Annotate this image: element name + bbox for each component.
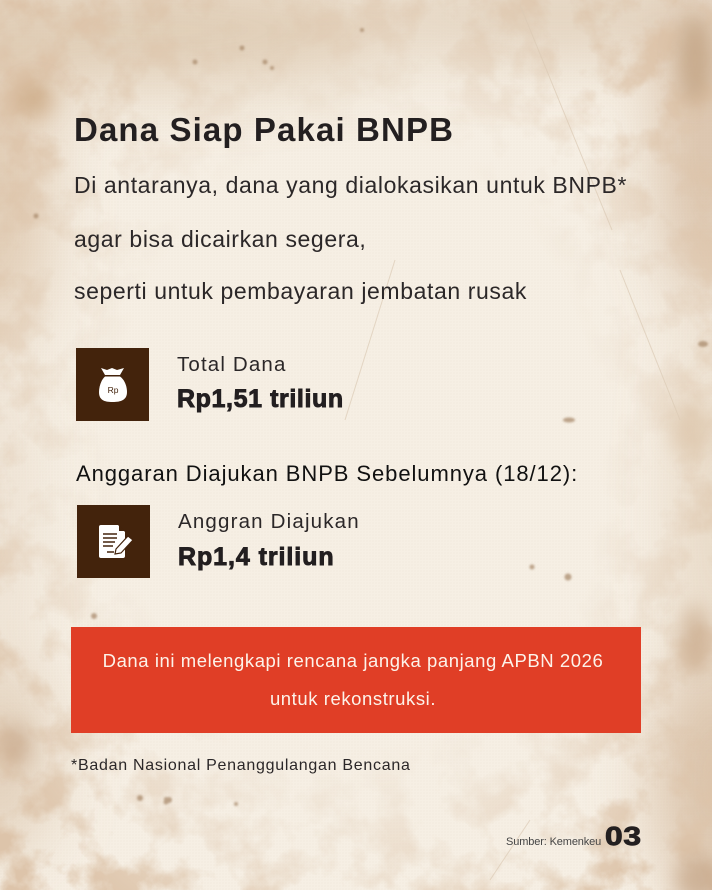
intro text: Di antaranya, dana yang dialokasikan untuk BNPB* — [74, 172, 627, 198]
icon: money bag: Rp — [108, 385, 119, 395]
callout: Dana ini melengkapi rencana jangka panjang APBN 2026 — [103, 650, 603, 671]
value: anggaran diajukan: Rp1,4 triliun — [178, 543, 335, 571]
icon: money bag — [76, 348, 149, 421]
title: Dana Siap Pakai BNPB — [74, 111, 454, 148]
footnote: *Badan Nasional Penanggulangan Bencana — [71, 757, 411, 774]
callout — [71, 627, 641, 733]
intro text: agar bisa dicairkan segera, — [74, 226, 366, 252]
value: total dana: Rp1,51 triliun — [177, 385, 344, 413]
icon: document with pen — [77, 505, 150, 578]
page number: 03 — [605, 821, 642, 851]
intro text: seperti untuk pembayaran jembatan rusak — [74, 278, 527, 304]
callout: untuk rekonstruksi. — [270, 688, 436, 709]
label: total dana: Total Dana — [177, 353, 287, 376]
label: anggaran diajukan: Anggran Diajukan — [178, 510, 360, 533]
source: Sumber: Kemenkeu — [506, 836, 601, 848]
subheading: Anggaran Diajukan BNPB Sebelumnya (18/12): — [76, 461, 578, 486]
intro text — [74, 172, 627, 304]
